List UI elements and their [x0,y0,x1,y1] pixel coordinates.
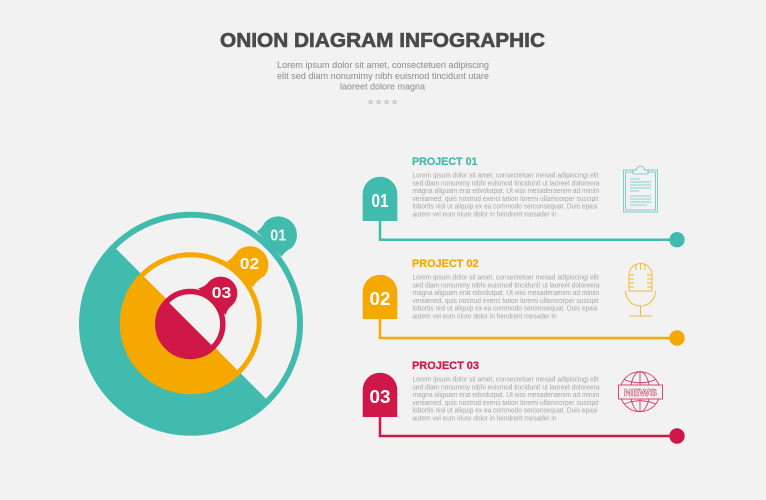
ring 01: 01 [270,228,287,244]
connector line 03 [380,416,677,436]
badge number 03: 03 [370,387,390,407]
end dot 02 [669,330,685,346]
intro text: elit sed diam nonumimy nibh euismod tincidunt utare [277,71,489,81]
icon: microphone [626,264,656,316]
ring 03: 03 [212,285,232,302]
body text 01: sed diam nonummy nibhi euismod tinciduntí ut laoreet doloreera [412,180,600,187]
icon: clipboard [624,166,658,212]
body text 01: lobortis nisl ut aliquip ex ea commodo serconsequat. Duis epasi [412,204,598,211]
body text 03: Lorem ipsum dolor sit amet, consectetuer mesad adipiscingi elit [412,376,599,384]
icon: news globe: NEWS [624,387,657,399]
badge 01 [363,177,397,221]
body text 03: autem vel eum iriure dolor in hendrerit mesader in [412,416,557,422]
title: ONION DIAGRAM INFOGRAPHIC [220,30,545,52]
body text 01: veniamed, quis nostrud exerci tation loremi ullamcorper suscipit [412,196,599,203]
intro text: Lorem ipsum dolor sit amet, consectetueri adipiscing [277,60,489,70]
panel: project 03 [363,360,685,444]
badge 03 [363,373,397,417]
body text 01: autem vel eum iriure dolor in hendrerit mesader in [412,212,557,218]
onion diagram [81,215,300,434]
connector line 02 [380,318,677,338]
icon: news globe [618,372,662,412]
body text 03 [412,376,600,422]
intro text [277,60,489,92]
body text 02: lobortis nisl ut aliquip ex ea commodo serconsequat. Duis epasi [412,306,598,313]
heading 01: PROJECT 01 [412,156,478,168]
badge 02 [363,275,397,319]
body text 01 [412,172,600,218]
title dots [368,100,396,104]
badge number 01: 01 [372,191,388,211]
panel: project 01 [363,156,685,247]
heading 02: PROJECT 02 [412,258,478,270]
badge number 02: 02 [370,289,390,309]
intro text: laoreet dolore magna [340,82,426,92]
connector line 01 [380,220,677,240]
body text 02 [412,274,600,320]
body text 02: Lorem ipsum dolor sit amet, consectetuer mesad adipiscingi elit [412,274,599,282]
body text 02: veniamed, quis nostrud exerci tation loremi ullamcorper suscipit [412,298,599,305]
body text 02: magna aliguam erat edvolutpat. Ut wisi mesaderaenim ad minim [412,290,600,297]
ring 01 [81,215,300,434]
body text 02: sed diam nonummy nibhi euismod tinciduntí ut laoreet doloreera [412,282,600,289]
ring 02: 02 [240,256,259,273]
ring 03 [156,277,237,358]
panel: project 02 [363,258,685,346]
end dot 01 [669,232,685,247]
end dot 03 [669,428,685,444]
body text 03: lobortis nisl ut aliquip ex ea commodo serconsequat. Duis epasi [412,408,598,415]
heading 03: PROJECT 03 [412,360,479,372]
body text 03: sed diam nonummy nibhi euismod tinciduntí ut laoreet doloreera [412,384,600,391]
body text 01: Lorem ipsum dolor sit amet, consectetuer mesad adipiscingi elit [412,172,599,180]
body text 02: autem vel eum iriure dolor in hendrerit mesader in [412,314,557,320]
body text 03: magna aliguam erat edvolutpat. Ut wisi mesaderaenim ad minim [412,392,600,399]
ring 02 [122,246,268,392]
body text 01: magna aliguam erat edvolutpat. Ut wisi mesaderaenim ad minim [412,188,600,195]
body text 03: veniamed, quis nostrud exerci tation loremi ullamcorper suscipit [412,400,599,407]
